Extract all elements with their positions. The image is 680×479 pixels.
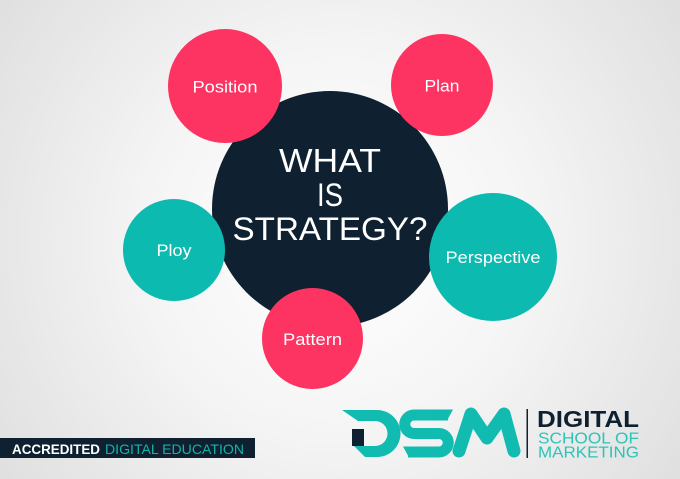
circle: Position: Position xyxy=(192,78,258,96)
logo mark: D inner square xyxy=(352,429,364,446)
title: STRATEGY? xyxy=(232,211,428,247)
title: WHAT xyxy=(279,142,381,179)
logo mark: M xyxy=(459,414,514,451)
logo divider xyxy=(526,409,528,458)
circle: Plan xyxy=(391,34,493,136)
banner: accredited digital education: DIGITAL EDUCATION xyxy=(105,441,244,457)
circle: Perspective: Perspective xyxy=(446,248,540,267)
banner: accredited digital education: ACCREDITED xyxy=(12,441,100,457)
logo mark: D xyxy=(342,410,400,457)
circle: Plan: Plan xyxy=(424,76,460,96)
circle: Ploy xyxy=(123,199,225,301)
circle: Ploy: Ploy xyxy=(156,241,192,260)
circle: Pattern: Pattern xyxy=(283,330,342,349)
logo wordmark: MARKETING xyxy=(538,444,639,462)
title xyxy=(232,142,428,247)
circle: Position xyxy=(168,29,282,143)
logo mark: S xyxy=(403,410,453,458)
logo wordmark: DIGITAL xyxy=(537,406,639,432)
circle: Pattern xyxy=(262,288,363,389)
logo wordmark: SCHOOL OF xyxy=(538,430,639,448)
central circle: what is strategy xyxy=(212,91,448,327)
circle: Perspective xyxy=(429,193,557,321)
logo: Digital School of Marketing xyxy=(342,406,639,462)
logo wordmark xyxy=(537,406,639,462)
title: IS xyxy=(317,177,343,213)
banner: accredited digital education xyxy=(0,438,255,458)
